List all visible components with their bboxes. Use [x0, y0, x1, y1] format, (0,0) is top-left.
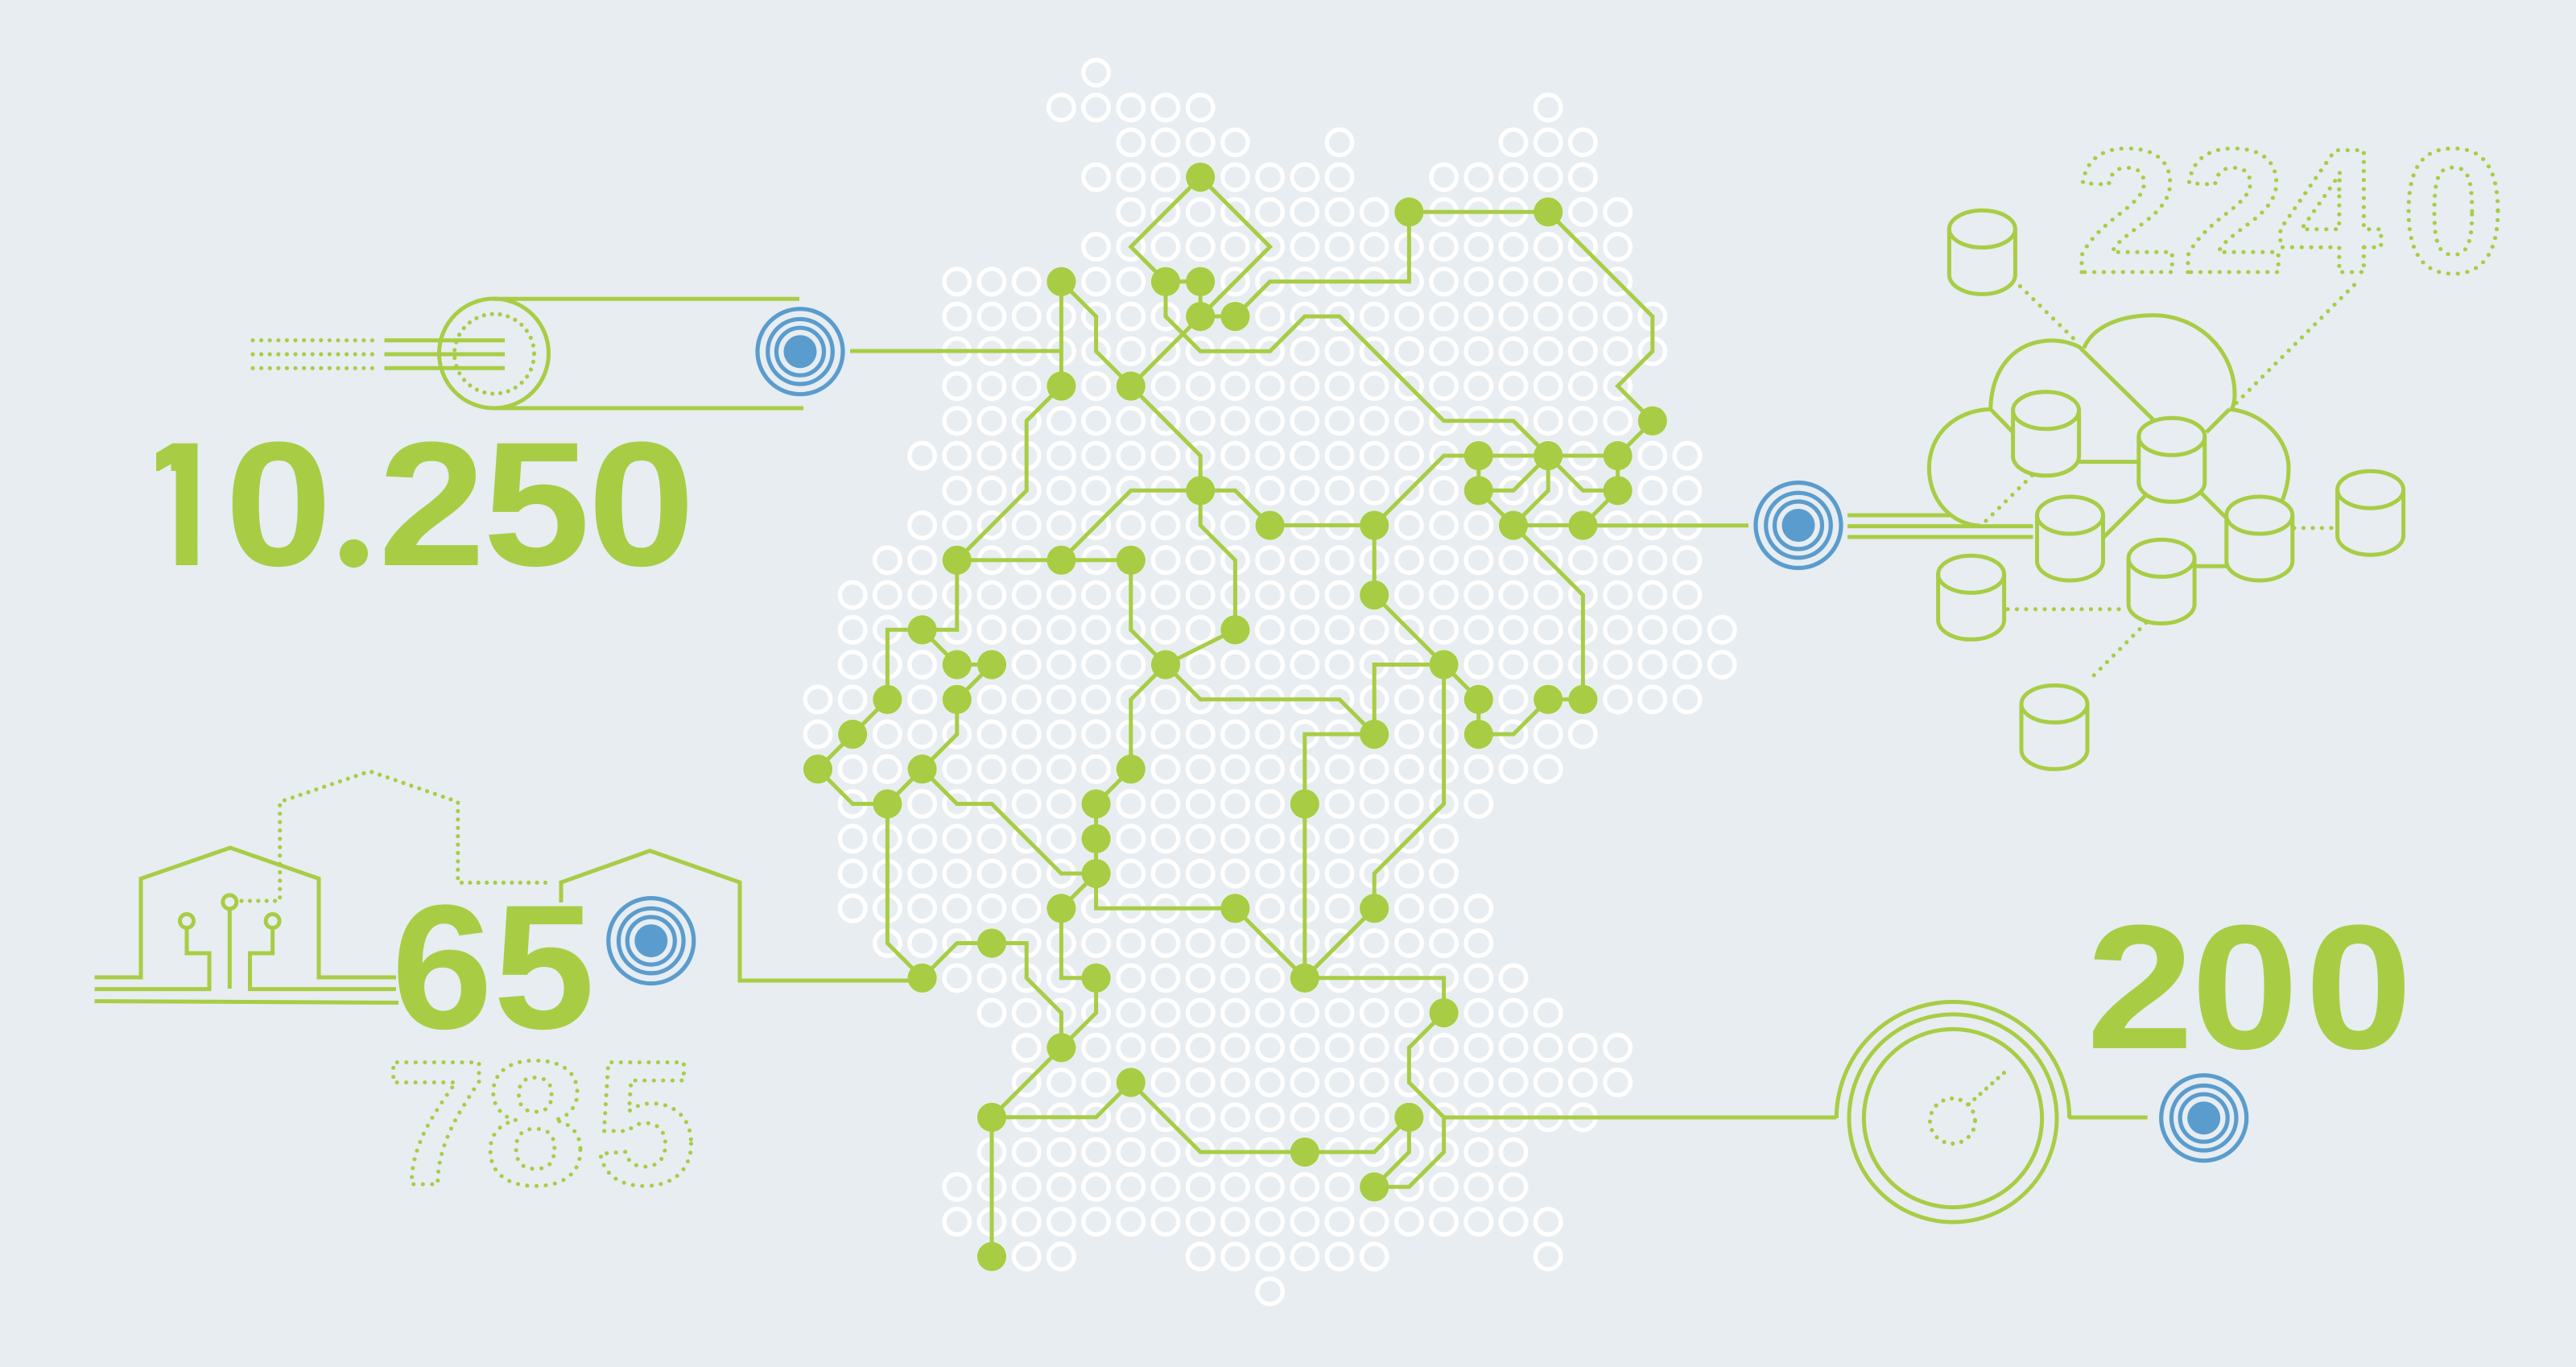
number: 65: 65: [391, 869, 595, 1066]
target: cloud: [1756, 483, 1841, 568]
icon: houses: [95, 771, 923, 1003]
connector: fibre target to map: [850, 349, 1061, 353]
number: 200: 200: [2087, 888, 2413, 1086]
target: fibre: [758, 309, 843, 394]
number: 2240 dotted outline: 2240: [2075, 113, 2506, 311]
connector: cloud target to map: [1583, 523, 1748, 527]
icon: cloud with databases: [1847, 210, 2404, 769]
network: green nodes: [803, 163, 1667, 1271]
dotted links: [1986, 285, 2354, 682]
target: gauge: [2161, 1076, 2247, 1161]
number: 785 dotted outline: 785: [386, 1025, 696, 1222]
icon: gauge: [1836, 1002, 2148, 1222]
icon: fibre optic cable: [253, 299, 803, 408]
connector: gauge to map: [1444, 1116, 1836, 1119]
uplink lines: [1847, 515, 2033, 537]
map of Germany: white ring dot grid: [800, 56, 1740, 1309]
target: households: [609, 898, 694, 984]
database cylinders: [1938, 210, 2404, 769]
cloud outline: [1929, 316, 2289, 566]
network: connecting lines over the map: [818, 177, 1653, 1257]
number: 10.250: 10.250: [126, 405, 695, 603]
